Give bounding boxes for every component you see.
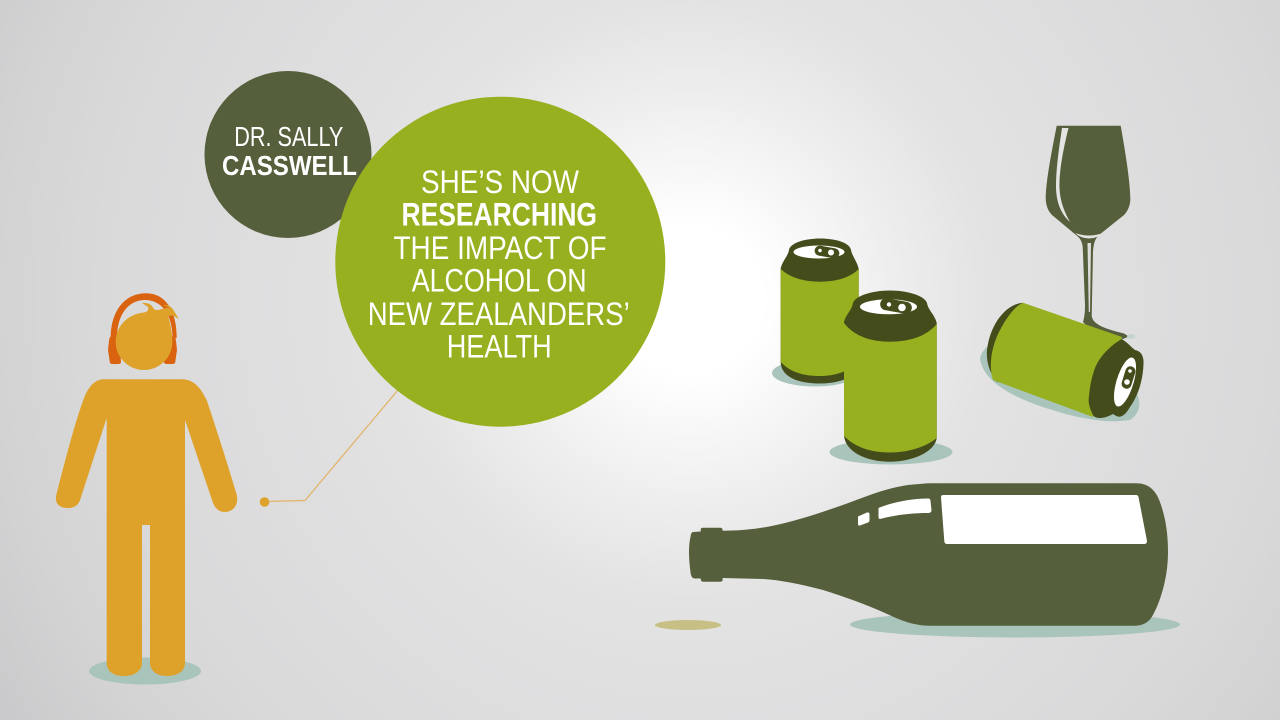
callout: research statement: RESEARCHING	[402, 197, 597, 233]
name badge: Dr. Sally Casswell: DR. SALLY	[234, 121, 344, 152]
callout: research statement: ALCOHOL ON	[412, 263, 587, 299]
name badge: Dr. Sally Casswell	[204, 71, 372, 238]
figure: person with headphones	[56, 293, 237, 684]
callout: research statement	[335, 97, 665, 427]
bottle label	[941, 495, 1147, 544]
icon: standing can, back	[772, 238, 859, 386]
faint shadow under glass foot	[1127, 334, 1135, 339]
icon: can lying on its side	[980, 303, 1144, 421]
connector line from person to callout	[260, 390, 398, 507]
head and hair	[116, 303, 179, 370]
name badge: Dr. Sally Casswell: CASSWELL	[222, 150, 357, 181]
body	[56, 379, 237, 676]
icon: standing can, front	[830, 290, 952, 464]
callout: research statement: THE IMPACT OF	[394, 230, 606, 266]
icon: wine bottle on its side	[689, 483, 1168, 626]
icon: bottle shadow	[850, 612, 1180, 638]
callout: research statement: NEW ZEALANDERS’	[368, 296, 630, 332]
callout: research statement: SHE’S NOW	[421, 164, 580, 200]
bottle highlights	[878, 498, 932, 519]
figure shadow	[89, 658, 201, 684]
headphones	[108, 293, 177, 364]
callout: research statement: HEALTH	[447, 329, 552, 365]
icon: spill on floor	[655, 620, 721, 630]
glass highlights	[1056, 128, 1070, 222]
icon: wine glass	[1046, 126, 1135, 339]
